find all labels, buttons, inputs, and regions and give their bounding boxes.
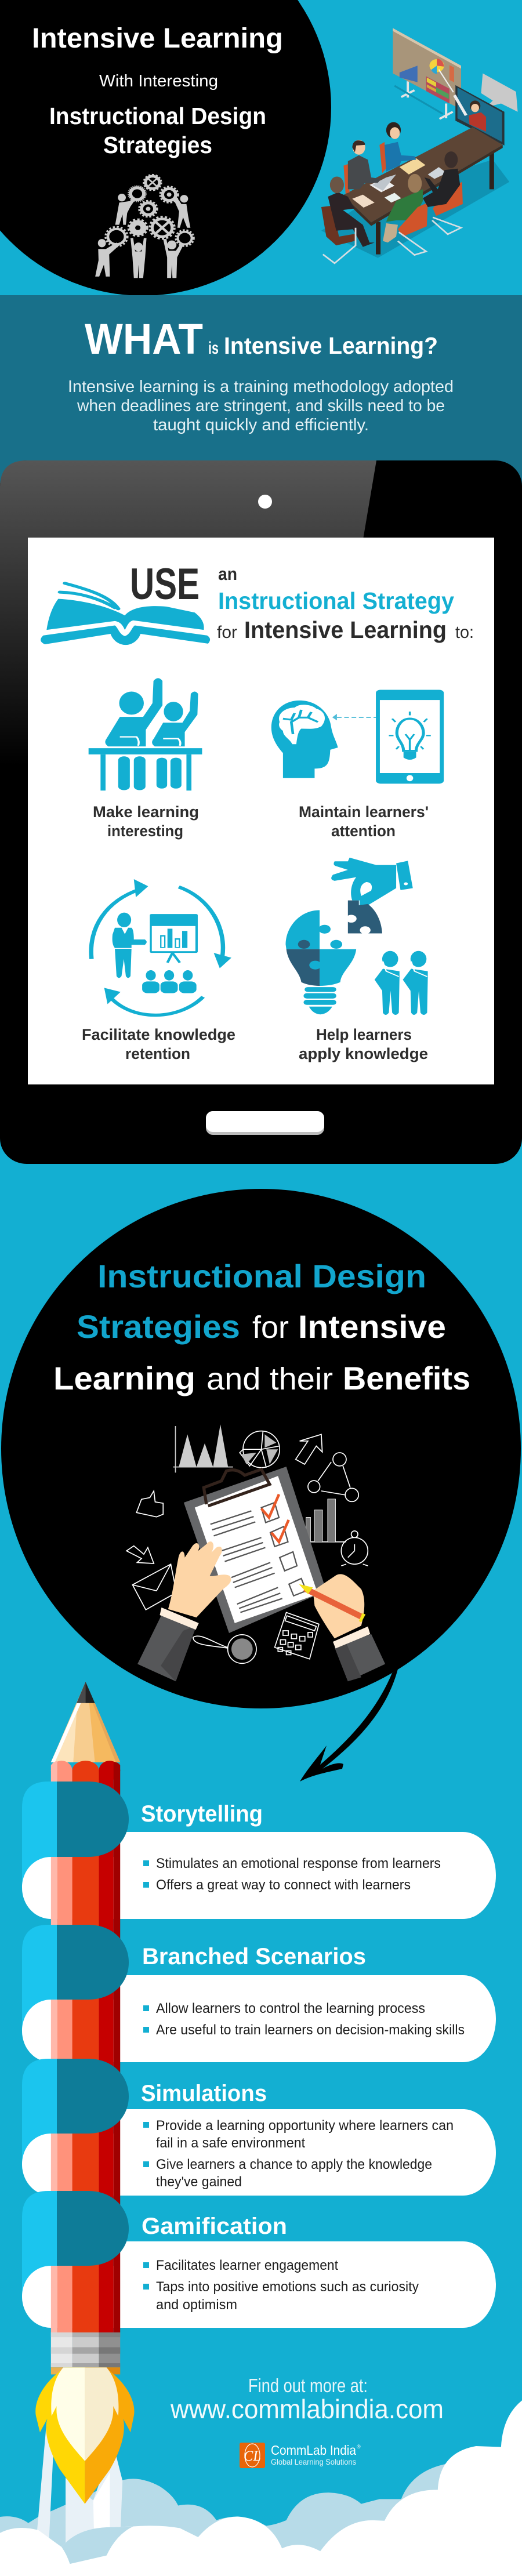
heading: use an instructional strategy: Intensive Learning [244, 616, 447, 643]
circle heading: Strategies [77, 1308, 240, 1345]
tab: simulations [22, 2059, 129, 2134]
panel: simulations: fail in a safe environment [156, 2135, 305, 2151]
speech bubble [481, 73, 518, 112]
panel: gamification [142, 2214, 419, 2313]
right hand [335, 1634, 385, 1681]
circle heading: Learning [53, 1360, 195, 1396]
tab: branched scenarios [22, 1925, 129, 2000]
logo: commlab india [240, 2443, 361, 2468]
label: help learners apply knowledge: apply knowledge [299, 1045, 428, 1062]
sketch icons [126, 1424, 368, 1663]
heading: use an instructional strategy: to: [455, 623, 474, 642]
illustration: checklist and hands [126, 1424, 385, 1681]
label: facilitate knowledge retention [82, 1026, 235, 1062]
title text: Intensive Learning [32, 23, 283, 54]
floor shadow [321, 159, 509, 258]
presentation board [393, 28, 461, 119]
circle heading: Intensive [298, 1308, 446, 1345]
label: make learning interesting: Make learning [93, 803, 199, 821]
heading: what is: WHAT [85, 315, 203, 363]
heading: what is [85, 315, 438, 363]
call to action [170, 2375, 444, 2424]
heading: use an instructional strategy: for [217, 623, 237, 642]
pencil tip [51, 1682, 120, 1762]
camera [258, 495, 272, 509]
definition text: Intensive learning is a training methodology adopted [68, 378, 454, 396]
logo: commlab india: CL [244, 2448, 261, 2464]
panel: storytelling: Stimulates an emotional response from learners [156, 1856, 441, 1871]
panel: gamification: Facilitates learner engagement [156, 2258, 338, 2273]
clipboard [184, 1467, 327, 1633]
label: facilitate knowledge retention: retention [125, 1045, 190, 1062]
heading: use an instructional strategy: an [218, 564, 237, 584]
circle heading: for [252, 1310, 289, 1345]
pencil body [51, 1761, 120, 2332]
tablet screen [28, 538, 494, 1084]
heading: use an instructional strategy [130, 560, 474, 643]
icon: open book [41, 583, 210, 645]
panel: simulations: they've gained [156, 2174, 242, 2190]
strategies circle [1, 1189, 521, 1708]
panel: storytelling: Offers a great way to connect with learners [156, 1877, 411, 1893]
clouds [0, 2400, 522, 2576]
tab: gamification [22, 2191, 129, 2266]
title text [32, 23, 283, 158]
call to action: www.commlabindia.com [170, 2394, 444, 2424]
panel: simulations: Give learners a chance to apply the knowledge [156, 2157, 432, 2172]
panel: gamification: and optimism [156, 2297, 237, 2313]
rocket flame [35, 2367, 134, 2504]
title circle [0, 0, 331, 296]
panel: branched scenarios: Branched Scenarios [142, 1944, 366, 1969]
title text: With Interesting [99, 72, 218, 90]
circle heading [53, 1258, 470, 1396]
label: maintain learners attention: attention [331, 822, 396, 840]
icon: brain and tablet with light bulb [271, 690, 444, 783]
definition text: taught quickly and efficiently. [153, 416, 369, 434]
tablet device [0, 460, 522, 1164]
panel: simulations: Provide a learning opportunity where learners can [156, 2118, 454, 2134]
left hand [137, 1615, 197, 1681]
heading: use an instructional strategy: USE [130, 560, 200, 609]
label: help learners apply knowledge: Help learners [316, 1026, 412, 1043]
arrow: to the strategies list [300, 1669, 398, 1782]
strategy panels background [22, 1832, 496, 2328]
meeting table [343, 127, 503, 255]
panel: branched scenarios: Allow learners to control the learning process [156, 2001, 425, 2016]
tab: storytelling [22, 1782, 129, 1857]
pencil ferrule [51, 2332, 120, 2374]
panel: gamification: Gamification [142, 2214, 287, 2239]
logo: commlab india: ® [357, 2444, 361, 2450]
icon: puzzle bulb and thinking learners [285, 858, 428, 1015]
title text: Strategies [103, 132, 212, 158]
panel: branched scenarios: Are useful to train learners on decision-making skills [156, 2022, 465, 2038]
panel: simulations [141, 2081, 454, 2190]
circle heading: Instructional Design [97, 1258, 426, 1294]
label: maintain learners attention [299, 803, 429, 840]
heading: use an instructional strategy: Instructional Strategy [218, 587, 454, 614]
panel: storytelling: Storytelling [141, 1801, 263, 1827]
panel: gamification: Taps into positive emotions such as curiosity [156, 2279, 419, 2295]
panel: branched scenarios [142, 1944, 465, 2038]
rocket smoke trail [35, 2422, 122, 2556]
circle heading: Benefits [343, 1360, 470, 1396]
band: what is intensive learning [0, 295, 522, 585]
label: make learning interesting [93, 803, 199, 840]
icon: people lifting gears [95, 175, 194, 278]
logo: commlab india: CommLab India [271, 2443, 356, 2458]
definition text [68, 378, 454, 434]
illustration: team meeting [321, 28, 518, 263]
label: help learners apply knowledge [299, 1026, 428, 1062]
heading: what is: Intensive Learning? [224, 332, 438, 359]
pencil rocket [51, 1682, 120, 2374]
video monitor with presenter [455, 85, 505, 146]
circle heading: and their [206, 1362, 333, 1396]
heading: what is: is [208, 339, 219, 358]
panel: simulations: Simulations [141, 2081, 267, 2106]
logo: commlab india: Global Learning Solutions [271, 2457, 356, 2466]
title text: Instructional Design [49, 103, 266, 129]
panel: storytelling [141, 1801, 441, 1893]
home button [206, 1111, 324, 1135]
icon: knowledge retention cycle [91, 879, 231, 1015]
label: facilitate knowledge retention: Facilitate knowledge [82, 1026, 235, 1043]
call to action: Find out more at: [248, 2375, 368, 2396]
label: make learning interesting: interesting [107, 822, 183, 840]
icon: students raising hands [89, 678, 202, 790]
definition text: when deadlines are stringent, and skills need to be [77, 397, 445, 415]
attendees [321, 122, 463, 263]
label: maintain learners attention: Maintain learners' [299, 803, 429, 821]
